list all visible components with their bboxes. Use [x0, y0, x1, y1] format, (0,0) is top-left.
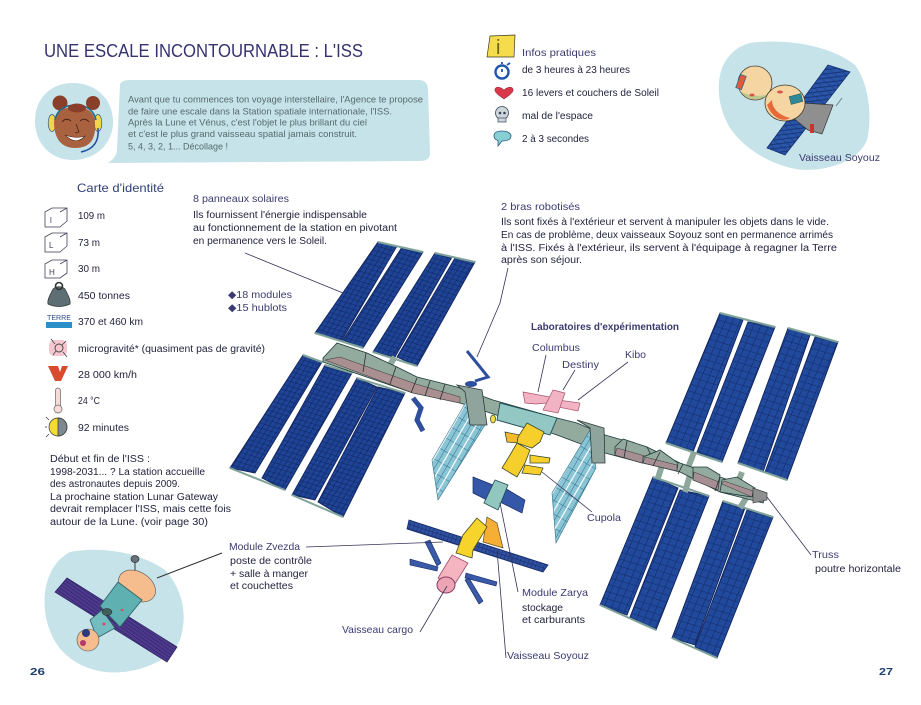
leader: Destiny	[563, 370, 575, 390]
label: Truss: poutre horizontale	[815, 564, 901, 575]
yellow docking modules	[490, 415, 550, 477]
leader: solar panels	[245, 253, 343, 293]
text: 2 bras robotisés: En cas de problème, deux vaisseaux Soyouz sont en permanence arrimés	[501, 230, 833, 241]
label: Truss: Truss	[812, 549, 839, 561]
leader: Soyuz	[497, 550, 506, 658]
panel: infos pratiques	[487, 35, 659, 146]
icon: microgravity	[49, 339, 67, 357]
diagram: International Space Station	[230, 242, 838, 658]
page number 26: 26	[30, 667, 46, 678]
label: Vaisseau Soyouz: Vaisseau Soyouz	[507, 650, 589, 662]
label: Module Zarya	[522, 587, 588, 626]
text: 8 panneaux solaires: 8 panneaux solaires	[193, 193, 289, 205]
text: 2 bras robotisés: après son séjour.	[501, 255, 582, 266]
text: début et fin de l'ISS: devrait remplacer l'ISS, mais cette fois	[50, 504, 231, 515]
leader: robotic arm	[477, 268, 508, 357]
label: Vaisseau cargo: Vaisseau cargo	[342, 624, 413, 636]
text: module Zvezda: poste de contrôle	[230, 556, 312, 567]
text: introduction: de faire une escale dans la Station spatiale internationale, l'ISS.	[128, 106, 392, 118]
label: Kibo: Kibo	[625, 349, 646, 361]
text: début et fin de l'ISS: autour de la Lune. (voir page 30)	[50, 517, 208, 528]
panel: carte d'identité: 73 m	[78, 238, 100, 249]
text: module Zvezda: et couchettes	[230, 581, 293, 592]
label: Truss	[812, 549, 901, 575]
panel: Soyuz spacecraft illustration	[719, 41, 880, 170]
label: Destiny: Destiny	[562, 359, 600, 371]
panel: speech bubble	[108, 80, 430, 163]
label: laboratoires d'expérimentation: Laboratoires d'expérimentation	[531, 321, 679, 333]
panel: carte d'identité	[45, 181, 265, 437]
icon: earth altitude	[46, 315, 72, 328]
panel: carte d'identité: microgravité* (quasiment pas de gravité)	[78, 344, 265, 355]
icon: astronaut face	[48, 96, 102, 152]
text: 8 panneaux solaires: Ils fournissent l'énergie indispensable	[193, 210, 367, 221]
dark blue radiators	[473, 477, 525, 513]
text: 2 bras robotisés	[501, 201, 837, 266]
text: module Zvezda: Module Zvezda	[229, 541, 300, 553]
icon: skull	[496, 106, 508, 122]
text: modules and portholes: ◆18 modules	[228, 289, 292, 301]
heading: carte d'identité: Carte d'identité	[77, 181, 164, 195]
panel: infos pratiques: de 3 heures à 23 heures	[522, 65, 630, 76]
central vertical module	[407, 517, 548, 604]
truss	[323, 343, 767, 508]
panel: carte d'identité: 109 m	[78, 211, 105, 222]
panel: carte d'identité: 370 et 460 km	[78, 317, 143, 328]
text: début et fin de l'ISS: Début et fin de l'ISS :	[50, 454, 150, 465]
text: introduction: Avant que tu commences ton voyage interstellaire, l'Agence te propose	[128, 94, 423, 106]
text: 2 bras robotisés: à l'ISS. Fixés à l'extérieur, ils servent à l'équipage à regagner la Terre	[501, 243, 837, 254]
text: début et fin de l'ISS	[50, 454, 231, 528]
text: 2 bras robotisés: 2 bras robotisés	[501, 201, 580, 213]
gray radiator supports	[457, 385, 605, 463]
panel: infos pratiques: 2 à 3 secondes	[522, 134, 589, 145]
leader: Zarya	[500, 503, 518, 592]
leader: Columbus	[538, 355, 546, 392]
leader: cargo	[420, 586, 447, 632]
text: module Zvezda: + salle à manger	[230, 569, 309, 580]
text: début et fin de l'ISS: La prochaine station Lunar Gateway	[50, 492, 218, 503]
text: 8 panneaux solaires: en permanence vers le Soleil.	[193, 236, 327, 247]
leader: Zvezda to illustration	[157, 553, 222, 578]
text: introduction	[128, 94, 423, 152]
heading: infos pratiques: Infos pratiques	[522, 47, 596, 59]
text: 8 panneaux solaires: au fonctionnement de la station en pivotant	[193, 223, 397, 234]
text: introduction: Après la Lune et Vénus, c'est l'objet le plus brillant du ciel	[128, 118, 367, 128]
panel: infos pratiques: 16 levers et couchers de Soleil	[522, 88, 659, 99]
icon: day and night	[45, 417, 67, 437]
solar panels: lower right	[600, 477, 773, 658]
text: 2 bras robotisés: Ils sont fixés à l'extérieur et servent à manipuler les objets dans le vide.	[501, 217, 829, 228]
icon: speech bubble	[494, 131, 511, 146]
label: Vaisseau Soyouz: Vaisseau Soyouz	[799, 152, 880, 164]
icon: width cube	[45, 233, 67, 252]
panel: infos pratiques: mal de l'espace	[522, 111, 593, 122]
Zarya cyan module	[484, 480, 508, 510]
icon: width cube: L	[49, 241, 54, 250]
label: Columbus: Columbus	[532, 342, 580, 354]
icon: length cube	[45, 208, 67, 227]
panel: carte d'identité: 450 tonnes	[78, 291, 130, 302]
label: Cupola: Cupola	[587, 512, 621, 524]
robotic arms	[413, 351, 488, 431]
text: 8 panneaux solaires	[193, 193, 397, 247]
leader: Zvezda to ISS	[306, 542, 443, 547]
title: UNE ESCALE INCONTOURNABLE : L'ISS	[44, 41, 363, 61]
icon: earth altitude: TERRE	[47, 315, 71, 322]
panel: carte d'identité: 92 minutes	[78, 423, 129, 434]
panel: Zvezda module illustration	[44, 550, 184, 672]
text: modules and portholes: ◆15 hublots	[228, 302, 287, 314]
label: Module Zarya: Module Zarya	[522, 587, 588, 599]
leader: truss	[767, 497, 811, 555]
icon: heart	[495, 87, 513, 99]
icon: info sticky note: i	[496, 37, 500, 59]
panel: carte d'identité: 24 °C	[78, 396, 100, 407]
text: début et fin de l'ISS: des astronautes depuis 2009.	[50, 479, 180, 490]
panel: carte d'identité: 28 000 km/h	[78, 370, 137, 381]
solar panels: upper left	[315, 242, 475, 366]
panel: astronaut avatar	[35, 83, 113, 160]
solar panels: lower left	[230, 355, 405, 517]
panel: carte d'identité: 30 m	[78, 264, 100, 275]
icon: height cube	[45, 260, 67, 278]
label: Module Zarya: et carburants	[522, 615, 585, 626]
laboratories: Columbus, Destiny, Kibo	[523, 390, 580, 413]
label: Module Zarya: stockage	[522, 603, 563, 614]
text: modules and portholes	[228, 289, 292, 314]
page number 27: 27	[879, 667, 894, 678]
text: introduction: et c'est le plus grand vaisseau spatial jamais construit.	[128, 129, 357, 140]
text: module Zvezda	[229, 541, 312, 592]
icon: speed V	[48, 366, 68, 381]
leader: Cupola	[542, 472, 592, 512]
radiators	[432, 397, 596, 543]
leader: Kibo	[578, 362, 628, 400]
icon: stopwatch	[496, 62, 510, 78]
icon: thermometer	[54, 388, 62, 413]
icon: length cube: l	[50, 216, 52, 225]
icon: weight	[48, 282, 70, 306]
text: début et fin de l'ISS: 1998-2031... ? La station accueille	[50, 467, 205, 478]
icon: info sticky note	[487, 35, 515, 59]
solar panels: upper right	[666, 313, 838, 480]
text: introduction: 5, 4, 3, 2, 1... Décollage !	[128, 142, 228, 152]
node module	[497, 403, 557, 435]
icon: height cube: H	[49, 268, 55, 277]
